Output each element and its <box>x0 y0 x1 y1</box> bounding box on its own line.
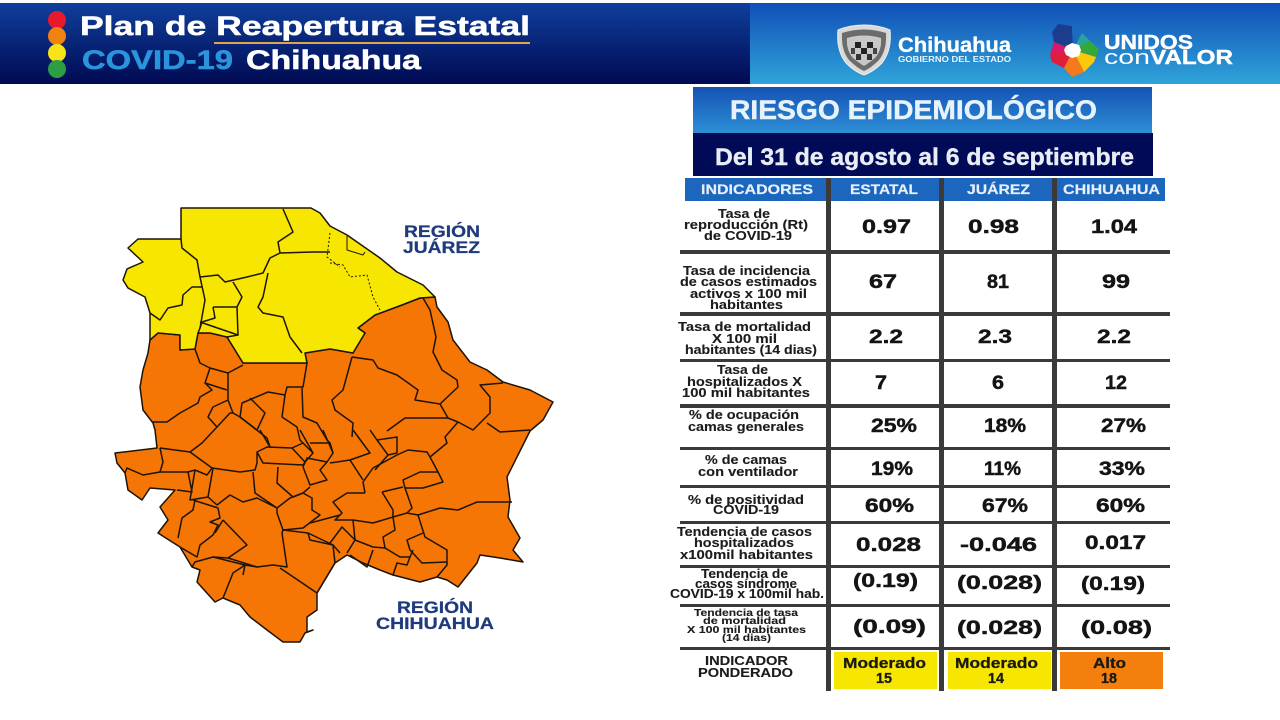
row: camas con ventilador: 11% <box>984 459 1021 480</box>
title line 2 place: Chihuahua <box>246 45 421 75</box>
icon: traffic light <box>48 11 66 78</box>
heading: Riesgo epidemiológico <box>693 87 1152 133</box>
row: tasa de hospitalizados <box>682 363 1127 400</box>
title underline <box>214 42 530 44</box>
row: tendencia mortalidad <box>687 607 1152 644</box>
row: camas con ventilador: % de camas <box>705 453 787 467</box>
row: tendencia síndrome COVID-19: (0.19) <box>1081 574 1145 595</box>
row: indicador ponderado: Moderado <box>843 655 926 672</box>
logo text: Gobierno del Estado: GOBIERNO DEL ESTADO <box>898 55 1011 64</box>
region label: Chihuahua <box>376 598 494 633</box>
region: yellow (Juárez) <box>123 208 435 363</box>
row: tasa de mortalidad: 2.2 <box>1097 327 1131 348</box>
row: tasa de reproducción: reproducción (Rt) <box>684 218 808 232</box>
row: indicador ponderado: Moderado <box>955 655 1038 672</box>
row: tendencia hospitalizados: hospitalizados <box>694 536 794 550</box>
row: tendencia mortalidad: (0.09) <box>853 617 926 638</box>
region label: Juárez <box>403 222 480 257</box>
table header row: ESTATAL <box>850 182 918 197</box>
row: tasa de mortalidad: habitantes (14 dias) <box>685 343 817 357</box>
row: ocupación camas generales: % de ocupación <box>689 408 799 422</box>
row: tasa de incidencia: de casos estimados <box>680 275 817 289</box>
row: ocupación camas generales: 25% <box>871 416 917 437</box>
row: tendencia mortalidad: (0.028) <box>957 618 1042 639</box>
row: ocupación camas generales: 27% <box>1101 416 1146 437</box>
row: tasa de hospitalizados: 7 <box>875 373 887 394</box>
row: tasa de reproducción: Tasa de <box>718 207 770 221</box>
table header row <box>685 178 1165 201</box>
icon: state shield <box>838 25 890 75</box>
row: indicador ponderado <box>698 652 1163 689</box>
row: tendencia síndrome COVID-19: COVID-19 x 100mil hab. <box>670 587 824 601</box>
row: tendencia hospitalizados: x100mil habitantes <box>680 548 813 562</box>
row: tasa de mortalidad <box>678 320 1131 357</box>
row: tasa de mortalidad: 2.2 <box>869 327 903 348</box>
map: Chihuahua risk regions <box>115 208 553 642</box>
logo text: Chihuahua: Chihuahua <box>898 34 1011 57</box>
region: orange (Chihuahua) <box>115 297 553 642</box>
row: indicador ponderado: Alto <box>1093 655 1126 672</box>
header banner: logos <box>750 3 1280 84</box>
row: tendencia síndrome COVID-19 <box>670 567 1145 601</box>
row: positividad: 60% <box>1096 496 1145 517</box>
row: camas con ventilador: 19% <box>871 459 913 480</box>
row: tasa de incidencia: 67 <box>869 272 897 293</box>
logo text: con: con <box>1104 47 1150 69</box>
row: tendencia hospitalizados <box>677 525 1146 562</box>
table: indicators <box>670 178 1170 691</box>
heading: date range <box>693 133 1153 176</box>
row: tasa de reproducción: 0.97 <box>862 217 911 238</box>
row: tendencia mortalidad: de mortalidad <box>703 615 786 627</box>
row: tendencia hospitalizados: -0.046 <box>960 535 1037 556</box>
region label: Chihuahua: CHIHUAHUA <box>376 614 494 633</box>
row: indicador ponderado: PONDERADO <box>698 666 793 680</box>
row: tendencia síndrome COVID-19: Tendencia de <box>701 567 788 581</box>
icon: Unidos con Valor map <box>1050 24 1099 77</box>
region label: Juárez: REGIÓN <box>404 222 480 241</box>
row: positividad: % de positividad <box>688 493 804 507</box>
row: tasa de reproducción: 1.04 <box>1091 217 1138 238</box>
row: tasa de incidencia: 81 <box>987 272 1009 293</box>
title line 2: COVID-19 <box>82 45 233 75</box>
row: positividad: 60% <box>865 496 914 517</box>
row: tasa de incidencia: Tasa de incidencia <box>683 264 811 278</box>
row: tasa de incidencia: 99 <box>1102 272 1130 293</box>
row: tasa de hospitalizados: Tasa de <box>717 363 768 377</box>
row: tendencia síndrome COVID-19: casos síndrome <box>695 577 797 591</box>
row: ocupación camas generales: camas generales <box>688 420 804 434</box>
table header row: JUÁREZ <box>967 182 1030 197</box>
table header row: INDICADORES <box>701 182 813 197</box>
row: indicador ponderado: 14 <box>988 670 1005 687</box>
row: tasa de hospitalizados: 100 mil habitantes <box>682 386 810 400</box>
region label: Juárez: JUÁREZ <box>403 238 480 257</box>
row: tasa de mortalidad: X 100 mil <box>712 332 777 346</box>
row: indicador ponderado: 18 <box>1101 670 1117 687</box>
row: indicador ponderado: 15 <box>876 670 892 687</box>
row: tasa de hospitalizados: 6 <box>992 373 1004 394</box>
table header row: CHIHUAHUA <box>1063 182 1160 197</box>
row: positividad: 67% <box>982 496 1028 517</box>
row: tasa de reproducción <box>684 207 1138 243</box>
row: ocupación camas generales: 18% <box>984 416 1026 437</box>
row: tendencia mortalidad: Tendencia de tasa <box>694 607 798 619</box>
row: tasa de incidencia: activos x 100 mil <box>690 287 807 301</box>
row: tendencia mortalidad: (0.08) <box>1081 618 1152 639</box>
table grid <box>680 178 1170 691</box>
row: tasa de incidencia: habitantes <box>710 298 783 312</box>
header banner: title <box>0 3 750 84</box>
logo text: Unidos: UNIDOS <box>1104 32 1193 54</box>
row: ocupación camas generales <box>688 408 1146 437</box>
row: tendencia hospitalizados: 0.028 <box>856 535 921 556</box>
row: positividad <box>688 493 1145 517</box>
row: tendencia hospitalizados: 0.017 <box>1085 533 1146 554</box>
heading: date range: Del 31 de agosto al 6 de septiembre <box>715 144 1134 171</box>
row: tendencia mortalidad: X 100 mil habitantes <box>687 624 806 636</box>
row: indicador ponderado: INDICADOR <box>705 654 788 668</box>
row: tendencia hospitalizados: Tendencia de casos <box>677 525 812 539</box>
row: tendencia síndrome COVID-19: (0.028) <box>957 573 1042 594</box>
title line 1: Plan de Reapertura Estatal <box>80 11 530 41</box>
row: tasa de reproducción: 0.98 <box>968 217 1019 238</box>
heading: Riesgo epidemiológico: RIESGO EPIDEMIOLÓGICO <box>730 95 1097 125</box>
row: tasa de hospitalizados: hospitalizados X <box>687 375 803 389</box>
row: tendencia mortalidad: (14 dias) <box>722 632 771 644</box>
row: tasa de hospitalizados: 12 <box>1105 373 1127 394</box>
row: camas con ventilador: 33% <box>1099 459 1145 480</box>
row: tasa de incidencia <box>680 264 1130 312</box>
row: tasa de mortalidad: 2.3 <box>978 327 1012 348</box>
row: positividad: COVID-19 <box>713 503 779 517</box>
row: camas con ventilador <box>698 453 1145 480</box>
region label: Chihuahua: REGIÓN <box>397 598 473 617</box>
row: camas con ventilador: con ventilador <box>698 465 798 479</box>
row: tendencia síndrome COVID-19: (0.19) <box>853 571 918 592</box>
row: tasa de mortalidad: Tasa de mortalidad <box>678 320 811 334</box>
logo text: Valor: VALOR <box>1150 47 1234 69</box>
municipal borders <box>125 209 530 598</box>
row: tasa de reproducción: de COVID-19 <box>704 229 792 243</box>
